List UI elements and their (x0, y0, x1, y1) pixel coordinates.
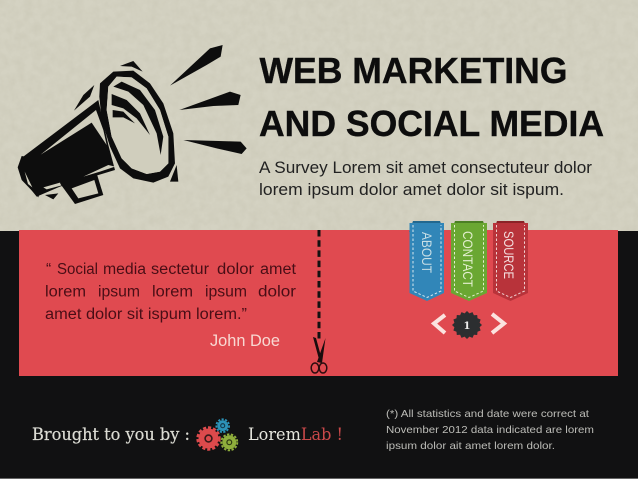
quote line two: ipsum (98, 284, 140, 300)
megaphone cap highlight (25, 172, 32, 187)
dashed cut line (318, 230, 320, 341)
megaphone end cap (18, 156, 40, 197)
pagination left arrow (434, 315, 445, 333)
quote line one: media (103, 261, 146, 278)
ribbon: contact: CONTACT (460, 231, 476, 287)
disclaimer (386, 408, 594, 452)
ribbon: about (409, 221, 444, 301)
quote line three: amet dolor sit ispum lorem.” (45, 306, 247, 323)
megaphone body highlights (41, 110, 115, 189)
megaphone handle (60, 173, 103, 204)
brought to you by: Brought to you by : (32, 425, 190, 445)
black lower background (0, 231, 638, 479)
title line one: WEB MARKETING (260, 50, 568, 91)
quote line one (46, 261, 297, 278)
bottom edge line (0, 478, 638, 479)
icon: gears logo (198, 419, 237, 450)
quote line one: “ (46, 261, 51, 278)
quote line one: amet (260, 261, 297, 278)
scissor handles (311, 363, 327, 373)
ribbon: contact (451, 221, 487, 301)
quote line one: dolor (217, 261, 254, 278)
megaphone accent marks (45, 61, 178, 199)
subtitle line two: lorem ipsum dolor amet dolor sit ispum. (259, 181, 564, 199)
megaphone bell (99, 71, 175, 183)
paper background (0, 0, 638, 231)
quote (45, 261, 297, 350)
disclaimer line two: November 2012 data indicated are lorem (386, 424, 594, 436)
ribbon: source (493, 221, 528, 301)
brand name: LoremLab ! (248, 425, 343, 445)
quote author: John Doe (210, 332, 280, 350)
red quote band (19, 230, 618, 376)
title (259, 50, 604, 144)
quote line two: lorem (45, 284, 86, 300)
quote line two: lorem (152, 284, 193, 300)
bell inner sound arcs (112, 82, 163, 155)
subtitle (259, 159, 593, 199)
quote line two: dolor (258, 284, 296, 300)
megaphone handle inside (72, 180, 98, 198)
icon: scissors (311, 337, 327, 373)
sound ray middle (179, 92, 241, 110)
quote line two: ipsum (205, 284, 247, 300)
sound ray bottom (183, 140, 247, 154)
blue gear (216, 419, 229, 432)
bell paper fill (107, 77, 168, 174)
ribbon: about: ABOUT (419, 232, 435, 273)
sound ray top (170, 45, 223, 86)
quote line one: sectetur (151, 261, 209, 278)
red gear (198, 428, 220, 450)
green gear (221, 434, 237, 450)
scissor blades (313, 337, 326, 363)
quote line one: Social (57, 261, 98, 278)
subtitle line one: A Survey Lorem sit amet consectuteur dolor (259, 159, 593, 177)
title line two: AND SOCIAL MEDIA (259, 103, 604, 144)
pagination right arrow (492, 314, 504, 333)
quote line two (45, 284, 296, 300)
pagination badge: 1 (464, 321, 470, 332)
disclaimer line three: ipsum dolor ait amet lorem dolor. (386, 440, 555, 452)
pagination badge (452, 311, 482, 339)
ribbon: source: SOURCE (501, 231, 517, 279)
disclaimer line one: (*) All statistics and date were correct at (386, 408, 589, 420)
icon: megaphone (18, 45, 247, 204)
megaphone body (23, 100, 115, 197)
